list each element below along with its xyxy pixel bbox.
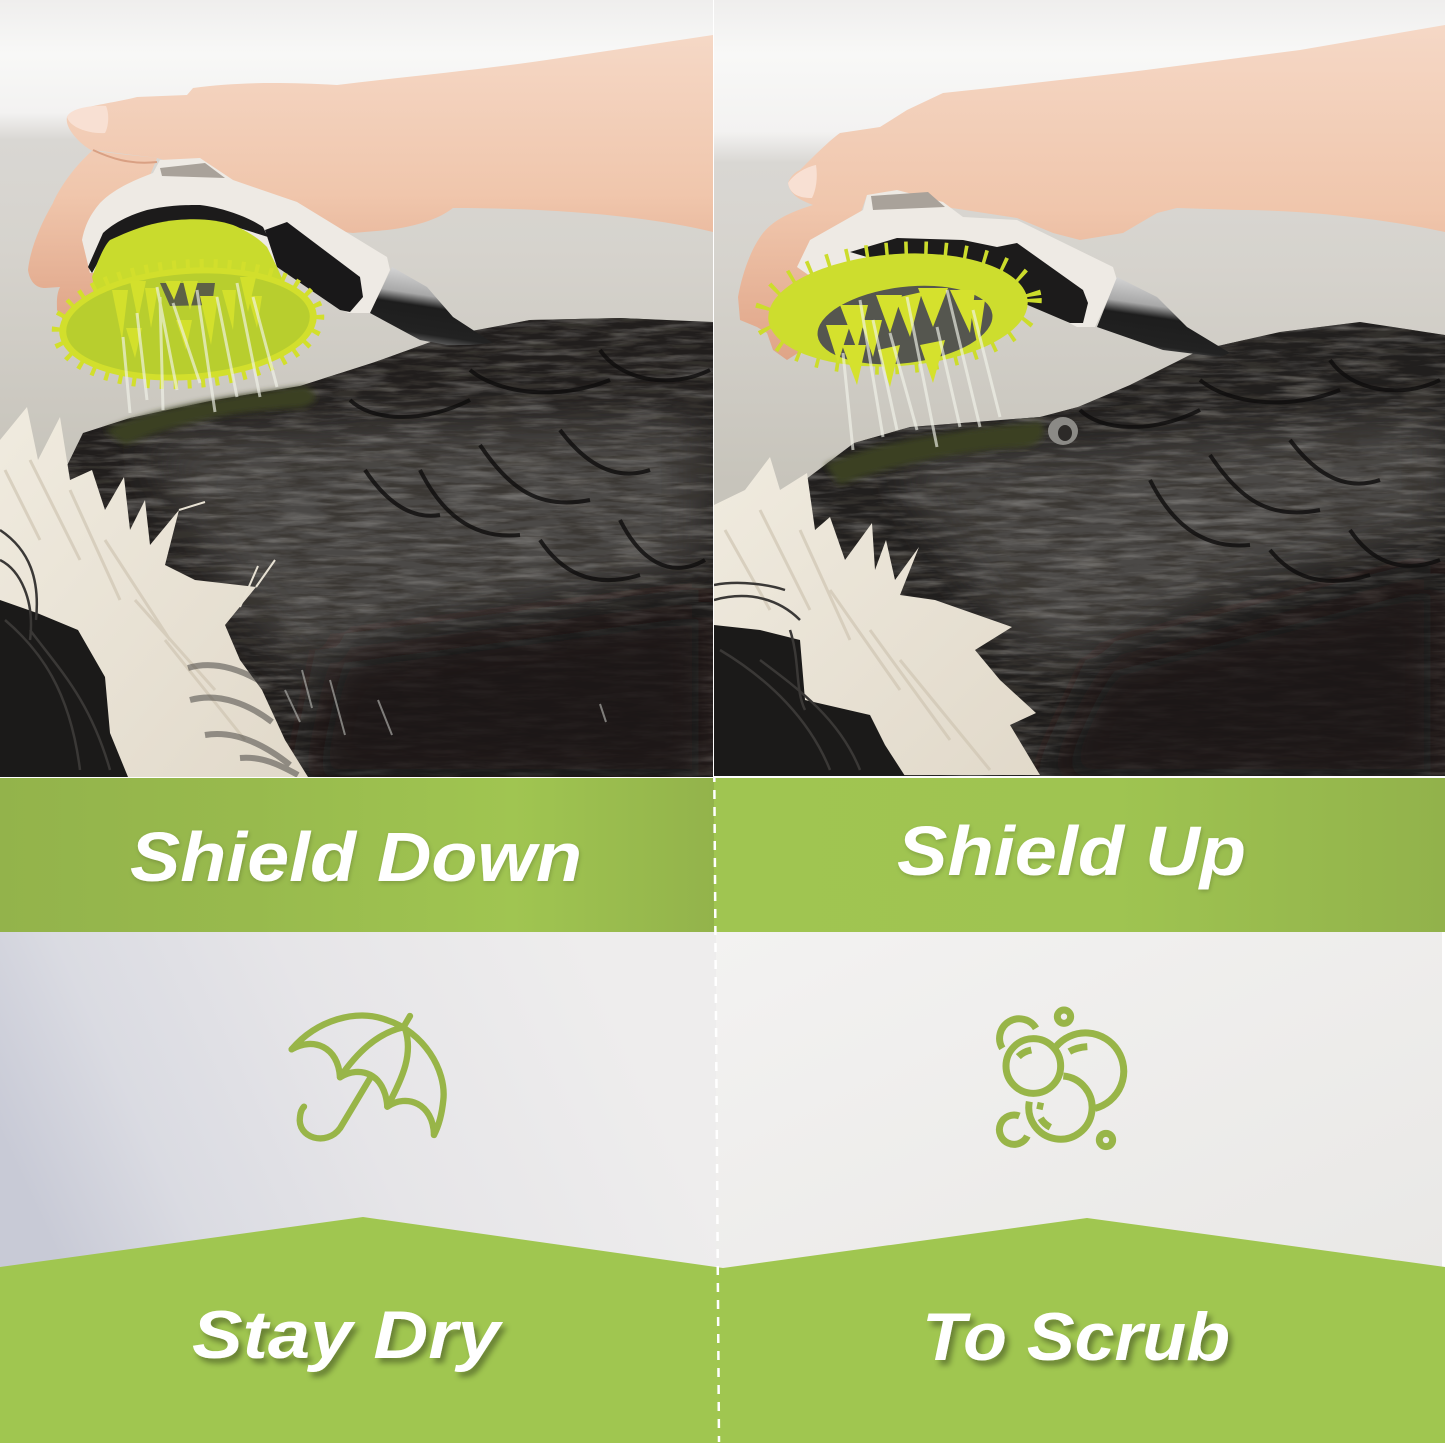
black fur patch xyxy=(0,530,128,777)
heading: to scrub: To Scrub xyxy=(922,1299,1230,1375)
arm and hand xyxy=(28,35,713,325)
white fur xyxy=(714,457,1040,775)
panel: stay dry icon area xyxy=(0,932,716,1272)
icon: bubbles xyxy=(999,1010,1124,1147)
banner: shield up xyxy=(714,778,1445,932)
yellow shield, down xyxy=(55,219,321,389)
black fur patch xyxy=(714,583,905,776)
yellow shield, up xyxy=(763,245,1033,387)
shower handle xyxy=(82,158,493,345)
water streams, up xyxy=(843,290,1000,450)
heading: stay dry: Stay Dry xyxy=(192,1297,504,1373)
heading: shield up: Shield Up xyxy=(897,812,1246,890)
divider xyxy=(714,778,719,1442)
panel: shield up photo xyxy=(714,0,1445,790)
dog body xyxy=(808,322,1445,776)
dog body xyxy=(68,318,713,777)
heading: shield down: Shield Down xyxy=(130,818,582,896)
banner: stay dry xyxy=(0,1217,723,1443)
panel: to scrub icon area xyxy=(716,932,1442,1272)
arm and hand xyxy=(738,25,1445,360)
icon: umbrella xyxy=(292,1016,444,1138)
white fur xyxy=(0,407,308,777)
panel: shield down photo xyxy=(0,0,713,790)
water streams, down xyxy=(123,283,277,413)
banner: shield down xyxy=(0,778,714,932)
shower handle xyxy=(797,190,1230,357)
banner: to scrub xyxy=(723,1218,1445,1443)
